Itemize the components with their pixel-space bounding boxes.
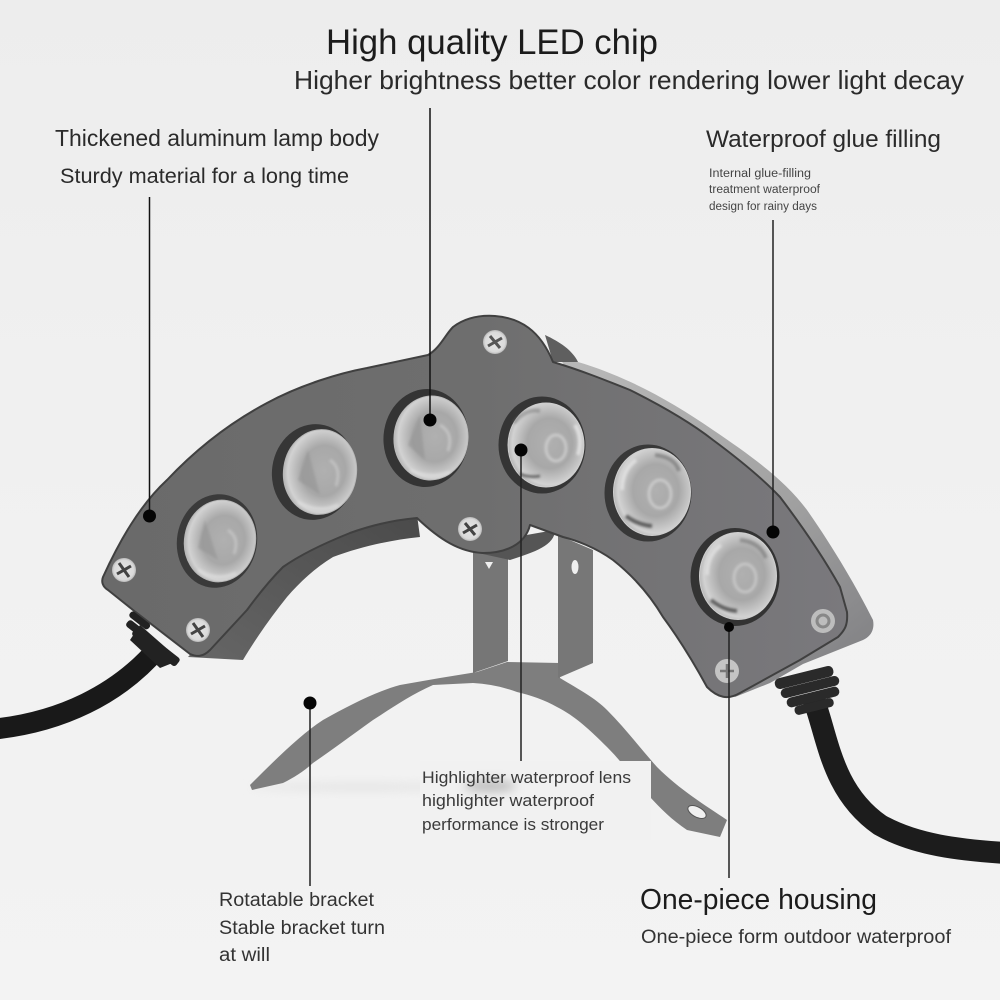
dot [143,510,156,522]
label: rotatable bracket: Stable bracket turn [219,918,385,939]
bracket foot [250,662,727,837]
bracket foot hole [686,803,708,821]
callout: aluminum body [143,197,156,522]
left cable [0,648,158,729]
lens 4 [498,396,586,494]
label: aluminum lamp body [55,125,379,188]
product illustration: LED lamp [0,316,1000,853]
right cable grommet [774,665,840,716]
bracket upright right [558,535,593,678]
leader line [309,703,311,886]
dot [514,444,528,456]
lamp rear side [545,335,873,697]
dot [304,696,316,710]
label background patch [420,761,651,840]
label: rotatable bracket: at will [219,945,270,966]
heading: high quality LED chip: Higher brightness better color rendering lower light decay [294,65,964,95]
foot ghost through patch [464,780,516,792]
screw 3 [483,330,507,354]
label: waterproof lens: Highlighter waterproof lens [422,768,631,787]
label: rotatable bracket [219,890,385,966]
dot [724,622,734,632]
screw 6 [811,609,835,633]
label: waterproof lens: highlighter waterproof [422,791,594,810]
screw 1 [112,558,136,582]
leader line [772,220,774,532]
leader line [520,450,522,761]
rear bump edge [545,335,578,362]
label: waterproof glue filling: Waterproof glue filling [706,126,941,153]
lens 2 [266,419,362,525]
screw 2 [186,618,210,642]
label: one-piece housing [640,884,952,948]
left lower dark band [188,515,420,660]
dot [766,526,780,538]
lens 1 [169,488,265,594]
floor shadow [250,779,523,791]
bracket hole left [485,562,493,569]
label: one-piece housing: One-piece form outdoor waterproof [641,927,952,948]
label: waterproof glue filling [706,126,941,213]
leader line [728,627,730,878]
callout: glue filling [766,220,780,538]
label: waterproof glue filling: Internal glue-filling [709,168,811,180]
label: aluminum lamp body: Thickened aluminum lamp body [55,125,379,151]
heading: high quality LED chip: High quality LED chip [326,23,658,62]
lens 6 [690,528,780,626]
bracket upright left [473,552,508,673]
label: waterproof glue filling: design for rainy days [709,201,817,213]
heading: high quality LED chip [294,23,964,95]
lens 3 [379,385,473,491]
lamp front face [102,316,847,697]
dot [424,414,436,426]
right cable [812,695,1000,853]
screw 4 [458,517,482,541]
label: rotatable bracket: Rotatable bracket [219,890,375,911]
label: waterproof lens [422,768,631,834]
callout: LED chip [424,108,436,426]
callout: waterproof lens [514,444,528,761]
bracket hole right [572,560,578,574]
callout: one-piece housing [724,622,734,878]
screws [112,330,835,683]
lens 5 [604,444,692,542]
callout: rotatable bracket [304,696,316,886]
left cable grommet [125,610,181,668]
label: waterproof glue filling: treatment waterproof [709,184,821,196]
label: aluminum lamp body: Sturdy material for a long time [60,164,349,188]
label: one-piece housing: One-piece housing [640,884,877,916]
leader line [429,108,431,420]
screw 5 [715,659,739,683]
label: waterproof lens: performance is stronger [422,815,604,834]
central lower hub [470,530,555,560]
leader line [148,197,150,516]
